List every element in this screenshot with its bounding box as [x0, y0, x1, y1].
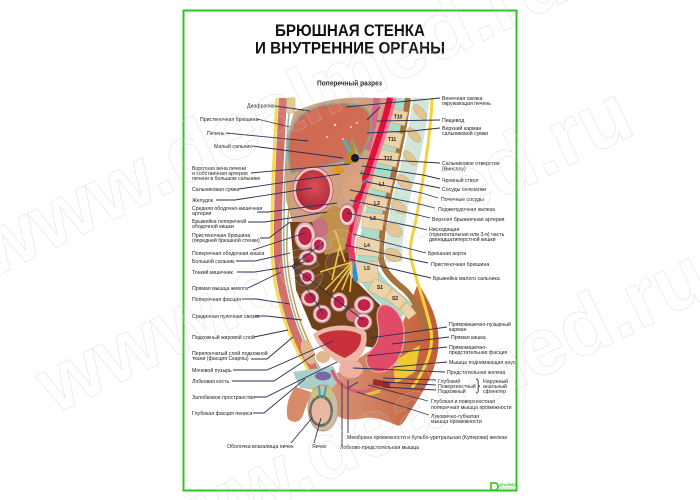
- vertebra labels: L2: [374, 201, 380, 207]
- label: pancreas: Поджелудочная железа: [438, 207, 495, 213]
- label: bladder: [192, 341, 333, 374]
- transverse colon and small intestine loops: [294, 204, 374, 330]
- spinous processes: [382, 103, 429, 264]
- title: И ВНУТРЕННИЕ ОРГАНЫ: [255, 38, 445, 58]
- label: testis: Яичко: [312, 444, 327, 450]
- bladder: [313, 326, 367, 369]
- label: pubic bone: [192, 354, 315, 385]
- label: middle colic artery: артерия: [192, 211, 212, 217]
- label: Scarpa fascia: ткани (фасция Скарпы): [192, 356, 249, 362]
- label: middle colic artery: Средняя ободочно-кишечная: [192, 206, 262, 212]
- label: liver: Печень: [207, 131, 225, 137]
- label: perineal membrane: Мембрана промежности и бульбо-уретральная (Куперова) железа: [347, 435, 507, 441]
- label: Scarpa fascia: Перепончатый слой подкожной: [192, 350, 268, 357]
- label: transverse perineal muscles: Глубокая и поверхностная: [431, 399, 495, 405]
- label: rectus abdominis: Прямая мышца живота: [192, 286, 248, 292]
- subtitle: Поперечный разрез: [317, 78, 382, 88]
- label: bulbospongiosus: Луковично-губчатая: [431, 414, 479, 420]
- left labels column: [192, 104, 507, 451]
- scrotum and testis: [308, 385, 338, 431]
- label: liver: [207, 131, 308, 141]
- label: testis: [312, 418, 327, 450]
- label: duodenum: двенадцатиперстной кишки: [429, 236, 496, 243]
- perianal fat: [393, 345, 420, 384]
- pancreas: [338, 169, 366, 203]
- label: rectum: Прямая кишка: [451, 335, 486, 341]
- penis: [287, 387, 311, 422]
- label: pubic bone: Лобковая кость: [192, 379, 229, 385]
- label: coronary ligament: [346, 96, 491, 120]
- mesentery fat: [312, 205, 352, 255]
- label: splenic vessels: Сосуды селезенки: [442, 187, 486, 193]
- label: abdominal aorta: Брюшная аорта: [428, 251, 466, 257]
- label: small intestine: [192, 243, 363, 320]
- right labels column: [345, 96, 516, 425]
- label: diaphragm: Диафрагма: [247, 104, 275, 110]
- label: parietal peritoneum anterior wall: [192, 222, 290, 244]
- label: superior mesenteric artery: [350, 200, 505, 223]
- label: celiac trunk: Чревный ствол: [442, 177, 478, 184]
- label: median umbilical ligament: [192, 314, 302, 320]
- label: rectoprostatic fascia: Прямокишечно-: [449, 345, 487, 351]
- label: tunica vaginalis: [227, 418, 312, 450]
- title: [255, 21, 445, 58]
- vertebra labels: S2: [392, 296, 398, 302]
- label: bladder: Мочевой пузырь: [192, 367, 232, 374]
- label: omental foramen: [353, 158, 500, 172]
- label: transverse mesocolon: [192, 212, 327, 230]
- label: mesentery: [345, 258, 500, 282]
- vertebra labels: L4: [364, 243, 370, 249]
- stomach: [293, 167, 333, 213]
- vertebra labels: L3: [370, 216, 376, 222]
- label: tunica vaginalis: Оболочка влагалища яичек: [227, 444, 294, 450]
- label: coronary ligament: Венечная связка: [442, 96, 482, 102]
- green page frame: [184, 10, 516, 490]
- label: mesentery: Брыжейка малого сальника: [433, 275, 500, 282]
- label: abdominal aorta: [353, 234, 466, 257]
- label: esophagus: [377, 118, 464, 124]
- rectum: [366, 305, 404, 372]
- label: superior mesenteric artery: Верхняя брыжеечная артерия: [432, 217, 505, 223]
- upper abdominal cavity: [286, 98, 392, 250]
- label: parietal peritoneum: [345, 245, 489, 268]
- label: greater omentum: [192, 253, 290, 265]
- label: prostate: [353, 368, 505, 376]
- label: parietal peritoneum: Пристеночная брюшина: [200, 117, 258, 123]
- vertebra labels: L5: [364, 266, 370, 272]
- pubic bone: [298, 338, 330, 366]
- label: omental bursa: Сальниковая сумка: [192, 187, 239, 193]
- label: Scarpa fascia: [192, 337, 293, 362]
- prostate: [339, 360, 363, 378]
- label: superior recess: [367, 125, 488, 137]
- label: transversalis fascia: [192, 297, 290, 304]
- label: duodenum: [347, 213, 505, 243]
- label: external anal sphincter: Глубокий: [438, 378, 460, 385]
- porta hepatis and lesser omentum: [332, 139, 368, 190]
- lower body flesh: [320, 283, 439, 426]
- logo: [491, 483, 517, 490]
- label: subcutaneous fat: [192, 330, 288, 341]
- label: duodenum: (горизонтальная или 3-я) часть: [429, 232, 505, 238]
- mesentery vessels: [320, 230, 352, 292]
- label: prostate: Предстательная железа: [447, 370, 505, 376]
- label: omental foramen: Сальниковое отверстие: [442, 161, 500, 167]
- label: external anal sphincter: Наружный: [483, 378, 508, 385]
- title: БРЮШНАЯ СТЕНКА: [275, 21, 425, 40]
- label: omental foramen: (Винслоу): [442, 166, 466, 172]
- label: external anal sphincter: анальный: [483, 383, 507, 390]
- label: diaphragm: [247, 104, 310, 111]
- label: subcutaneous fat: Подкожный жировой слой: [192, 334, 255, 341]
- retropubic space: [293, 366, 340, 392]
- label: parietal peritoneum anterior wall: Пристеночная брюшина: [192, 233, 250, 239]
- label: perineal membrane: [347, 380, 507, 441]
- label: stomach: Желудок: [192, 198, 214, 204]
- label: duodenum: Нисходящая: [429, 227, 460, 233]
- label: rectoprostatic fascia: предстательная фасция: [449, 350, 508, 356]
- label: deep penile fascia: [192, 379, 305, 417]
- label: levator ani: [393, 360, 516, 367]
- label: parietal peritoneum: Пристеночная брюшина: [431, 262, 489, 268]
- label: middle colic artery: [192, 203, 337, 217]
- label: transversalis fascia: Поперечная фасция: [192, 297, 241, 303]
- label: rectovesical pouch: карман: [449, 327, 467, 333]
- label: transverse perineal muscles: [368, 385, 512, 411]
- label: portal vein: печени в большом сальнике: [192, 176, 260, 182]
- label: median umbilical ligament: Срединная пупочная связка: [192, 314, 260, 320]
- label: puboprostatic muscle: Лобково-предстательная мышца: [340, 445, 419, 451]
- vertebra labels: S1: [377, 285, 383, 291]
- label: lesser omentum: Малый сальник: [214, 143, 252, 150]
- label: parietal peritoneum anterior wall: (передней брюшной стенки): [192, 237, 260, 244]
- label: coronary ligament: окружающая печень: [442, 101, 491, 107]
- label: renal vessels: Почечные сосуды: [441, 197, 484, 203]
- logo: ДЕАЛМЕД: [499, 483, 517, 487]
- anatomical illustration: sagittal section: [272, 98, 439, 431]
- vertebra labels: T10: [394, 114, 403, 120]
- label: greater omentum: Большой сальник: [192, 258, 235, 265]
- label: rectovesical pouch: [370, 321, 511, 338]
- label: rectus abdominis: [192, 272, 281, 292]
- label: renal vessels: [367, 182, 484, 203]
- urethra and sphincter: [332, 370, 390, 395]
- label: external anal sphincter: Подкожный: [438, 388, 466, 395]
- label: omental bursa: [192, 174, 340, 193]
- label: bulbospongiosus: мышца промежности: [431, 419, 482, 425]
- label: celiac trunk: [362, 166, 478, 184]
- label: transverse colon: [192, 233, 305, 257]
- label: levator ani: Мышца поднимающая анус: [449, 360, 516, 366]
- spine soft tissue and discs: [367, 98, 432, 388]
- label: lesser omentum: [214, 143, 343, 158]
- label: portal vein: Воротная вена печени: [192, 166, 246, 172]
- watermark: www.dealmed.ru: [21, 67, 646, 432]
- label: superior recess: Верхний карман: [442, 125, 481, 132]
- label: retropubic space: Залобковое пространство: [192, 395, 255, 401]
- label: portal vein: и собственная артерия: [192, 171, 248, 177]
- label: retropubic space: [192, 362, 337, 401]
- label: transverse perineal muscles: поперечная мышца промежности: [431, 405, 512, 411]
- label: parietal peritoneum: [200, 117, 290, 127]
- label: transverse mesocolon: ободочной кишки: [192, 223, 234, 230]
- label: rectum: [392, 335, 486, 344]
- esophagus and aorta: [348, 98, 392, 281]
- label: external anal sphincter: Поверхностный: [438, 383, 476, 390]
- vertebrae: [355, 108, 416, 320]
- vertebra labels: [364, 114, 403, 302]
- label: stomach: [192, 188, 312, 204]
- vertebra labels: T12: [384, 156, 393, 162]
- label: portal vein: [192, 164, 350, 182]
- label: external anal sphincter: сфинктер: [483, 389, 506, 395]
- liver: [288, 104, 371, 173]
- label: esophagus: Пищевод: [442, 118, 464, 124]
- label: puboprostatic muscle: [340, 383, 419, 451]
- mesentery cavity: [290, 222, 397, 348]
- vertebra labels: T11: [388, 137, 396, 143]
- label: deep penile fascia: Глубокая фасция пениса: [192, 411, 252, 417]
- rib: [287, 98, 295, 113]
- liver speckles: [326, 122, 358, 140]
- label: pancreas: [350, 190, 495, 213]
- label: small intestine: Тонкий кишечник: [192, 269, 234, 276]
- label: superior recess: сальниковой сумки: [442, 130, 488, 137]
- label: transverse colon: Поперечная ободочная кишка: [192, 251, 264, 257]
- label: external anal sphincter: [383, 378, 508, 395]
- vertebra labels: L1: [379, 182, 385, 188]
- label: bulbospongiosus: [357, 392, 482, 425]
- label: rectoprostatic fascia: [367, 345, 508, 356]
- label: splenic vessels: [360, 173, 486, 193]
- label: transverse mesocolon: Брыжейка поперечной: [192, 218, 246, 225]
- label: rectovesical pouch: Прямокишечно-пузырный: [449, 321, 511, 328]
- anterior abdominal wall: [272, 98, 322, 372]
